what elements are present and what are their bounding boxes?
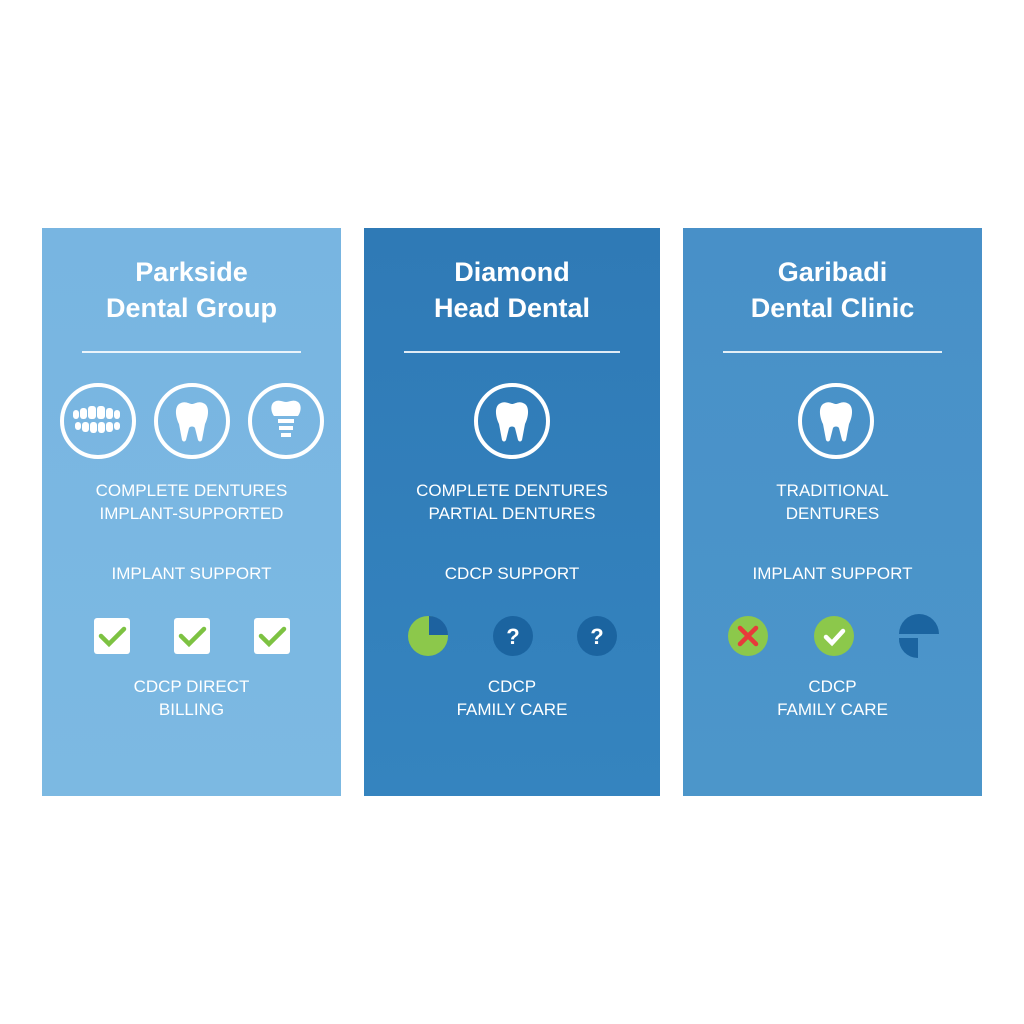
panel: Diamond Head Dental: COMPLETE DENTURES (416, 481, 608, 500)
panel: Diamond Head Dental: PARTIAL DENTURES (429, 504, 595, 523)
title: Garibadi (778, 257, 887, 287)
title (751, 257, 914, 323)
bottom text: CDCP (808, 677, 857, 696)
icons (408, 383, 617, 656)
title: Diamond (454, 257, 570, 287)
label: CDCP SUPPORT (445, 564, 579, 583)
title: Dental Group (106, 293, 277, 323)
panel: Garibadi Dental Clinic: TRADITIONAL (776, 481, 889, 500)
bottom text: FAMILY CARE (457, 700, 567, 719)
icons (728, 383, 939, 658)
panel: Garibadi Dental Clinic: DENTURES (786, 504, 879, 523)
title (106, 257, 277, 323)
title: Parkside (135, 257, 248, 287)
bottom text (777, 677, 888, 719)
icons: dentures, tooth, implant (60, 383, 324, 654)
label: IMPLANT SUPPORT (112, 564, 271, 583)
icons: ? (506, 624, 520, 649)
services text: IMPLANT-SUPPORTED (100, 504, 283, 523)
bottom text (457, 677, 567, 719)
title: Head Dental (434, 293, 590, 323)
panel: Diamond Head Dental (364, 228, 660, 796)
bottom text: BILLING (159, 700, 224, 719)
bottom text: FAMILY CARE (777, 700, 888, 719)
title (434, 257, 590, 323)
bottom text: CDCP (488, 677, 536, 696)
bottom text: CDCP DIRECT (134, 677, 249, 696)
label: IMPLANT SUPPORT (753, 564, 912, 583)
icons: ? (590, 624, 604, 649)
title: Dental Clinic (751, 293, 914, 323)
panel: Garibadi Dental Clinic (683, 228, 982, 796)
panel: Parkside Dental Group (42, 228, 341, 796)
services text: COMPLETE DENTURES (96, 481, 287, 500)
bottom text (134, 677, 249, 719)
services text (96, 481, 287, 523)
